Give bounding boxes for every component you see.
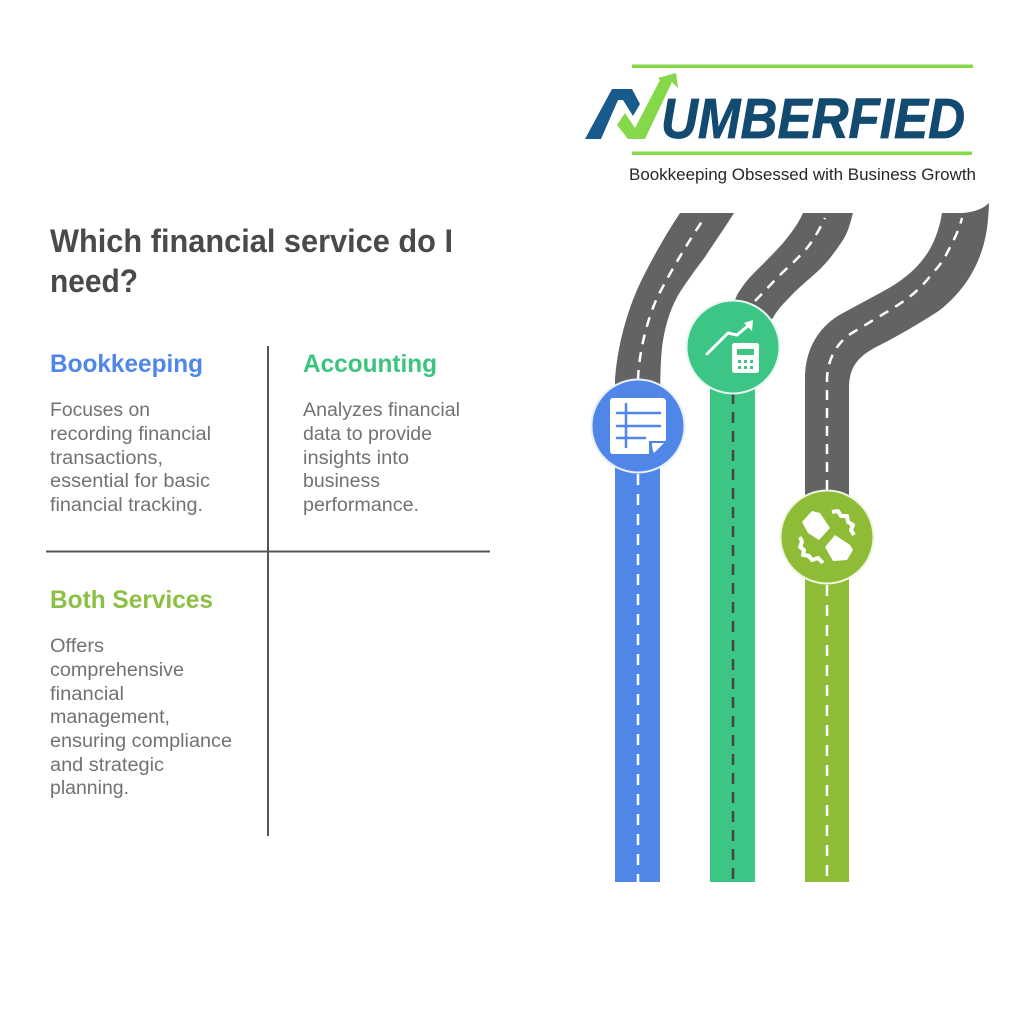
text: accounting description: insights into: [303, 448, 409, 469]
panel: bookkeeping: [50, 350, 211, 516]
icon: both services handshake gears: [780, 490, 874, 584]
icon: bookkeeping document: [592, 380, 684, 472]
text: both services description: ensuring compliance: [50, 731, 232, 752]
heading: both services: Both Services: [50, 586, 213, 614]
text: both services description: Offers: [50, 636, 104, 657]
bar: blue lane: [615, 430, 660, 882]
text: bookkeeping description: essential for basic: [50, 471, 210, 492]
icon: accounting calculator and growth arrow: [686, 300, 780, 394]
text: bookkeeping description: recording financial: [50, 424, 211, 445]
logo wordmark: UMBERFIED: [661, 87, 965, 151]
text: bookkeeping description: financial tracking.: [50, 495, 203, 516]
road: both services path: [805, 203, 989, 882]
title: need?: [50, 263, 138, 299]
road: bookkeeping path: [615, 213, 734, 882]
bar: olive lane: [805, 540, 849, 882]
heading: bookkeeping: Bookkeeping: [50, 350, 203, 378]
text: accounting description: [303, 400, 460, 516]
text: accounting description: Analyzes financial: [303, 400, 460, 421]
panel: accounting: [303, 350, 460, 516]
text: both services description: [50, 636, 232, 799]
title: Which financial service do I: [50, 223, 453, 259]
title: [50, 223, 453, 299]
heading: accounting: Accounting: [303, 350, 437, 378]
logo: Numberfied: [585, 64, 976, 184]
panel: both services: [50, 586, 232, 799]
text: both services description: financial: [50, 684, 124, 705]
text: accounting description: data to provide: [303, 424, 432, 445]
road: accounting path: [710, 213, 853, 882]
text: bookkeeping description: transactions,: [50, 448, 163, 469]
text: accounting description: business: [303, 471, 380, 492]
logo mark: blue N stroke: [585, 89, 640, 139]
text: both services description: comprehensive: [50, 660, 184, 681]
logo mark: green growth arrow: [617, 73, 678, 139]
logo tagline: Bookkeeping Obsessed with Business Growth: [629, 165, 976, 184]
text: bookkeeping description: [50, 400, 211, 516]
text: both services description: planning.: [50, 778, 129, 799]
quadrant divider lines: [46, 346, 490, 836]
text: accounting description: performance.: [303, 495, 419, 516]
text: both services description: management,: [50, 707, 170, 728]
text: bookkeeping description: Focuses on: [50, 400, 150, 421]
bar: green lane: [710, 350, 755, 882]
text: both services description: and strategic: [50, 755, 164, 776]
